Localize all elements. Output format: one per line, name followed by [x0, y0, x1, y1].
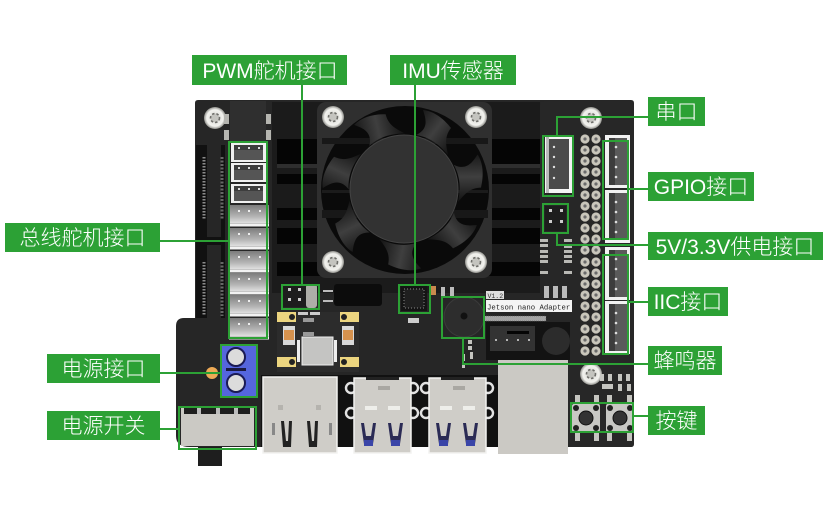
- callout: power switch: [160, 407, 256, 449]
- callout: PWM servo interface: [282, 85, 319, 309]
- 5V/3.3V header: [545, 206, 566, 231]
- label: bus servo: [5, 223, 160, 252]
- callout: serial port: [543, 117, 648, 196]
- yellow pad: [206, 367, 218, 379]
- power terminal: [222, 346, 257, 396]
- USB port 3: [429, 377, 486, 453]
- USB port 1: [263, 377, 337, 453]
- black base under USB ports: [261, 375, 501, 447]
- buttons: [572, 395, 634, 441]
- small SMD row: [540, 239, 572, 274]
- label: IIC: IIC接口: [654, 291, 722, 314]
- board base: [176, 100, 634, 447]
- version tag: [486, 291, 504, 300]
- pin header 2x20: [580, 134, 601, 356]
- label: IIC: [648, 287, 728, 316]
- side panel: [540, 101, 634, 447]
- label: IMU: IMU传感器: [402, 60, 504, 83]
- label: 5V/3.3V: 5V/3.3V供电接口: [656, 236, 814, 259]
- callout: GPIO: [603, 141, 648, 239]
- caps above regulator: [408, 286, 567, 323]
- regulator circuit: [277, 312, 359, 372]
- ethernet port: [498, 360, 568, 454]
- label: buttons: 按键: [656, 410, 698, 433]
- label: power input: 电源接口: [62, 358, 146, 381]
- adapter name tag: [486, 300, 572, 312]
- callout: power input: [160, 345, 257, 397]
- left ribbon sockets: [196, 145, 225, 318]
- fpc and small connector: [484, 316, 570, 360]
- IMU chip: [401, 286, 427, 311]
- label: serial: 串口: [656, 101, 698, 124]
- callout: buttons: [571, 403, 648, 432]
- GPIO and IIC connectors: [605, 135, 630, 354]
- servo connectors: [229, 143, 269, 340]
- serial connector: [545, 137, 573, 193]
- PWM header and diode: [283, 284, 382, 308]
- lower-right SMD: [600, 374, 631, 391]
- heat sink: [272, 102, 540, 293]
- version tag: V1.2: [488, 293, 503, 300]
- label: buzzer: [648, 346, 722, 375]
- callout: IMU sensor: [399, 85, 430, 313]
- label: power switch: 电源开关: [62, 415, 146, 438]
- label: buttons: [648, 406, 705, 435]
- SMD near buzzer: [462, 340, 473, 368]
- callout: bus servo: [160, 142, 267, 338]
- top-left power block: [224, 101, 271, 141]
- fan: [317, 102, 495, 281]
- label: serial: [648, 97, 705, 126]
- label: IMU: [390, 55, 516, 85]
- label: power switch: [47, 411, 160, 440]
- label: bus servo: 总线舵机接口: [20, 227, 146, 250]
- callout: IIC: [603, 255, 648, 354]
- USB hole rings: [346, 383, 493, 418]
- adapter name tag: Jetson nano Adapter: [487, 304, 570, 312]
- callout: 5V/3.3V: [543, 204, 648, 245]
- board: Jetson Nano adapter: [176, 100, 634, 466]
- board screws: [204, 107, 602, 385]
- label: buzzer: 蜂鸣器: [654, 350, 716, 373]
- label: GPIO: GPIO接口: [654, 176, 748, 199]
- USB port 2: [354, 377, 411, 453]
- buzzer: [444, 297, 484, 337]
- label: PWM: [192, 55, 347, 85]
- power switch: [181, 408, 254, 466]
- callout: buzzer: [442, 297, 648, 364]
- label: power input: [47, 354, 160, 383]
- label: PWM: PWM舵机接口: [202, 60, 338, 83]
